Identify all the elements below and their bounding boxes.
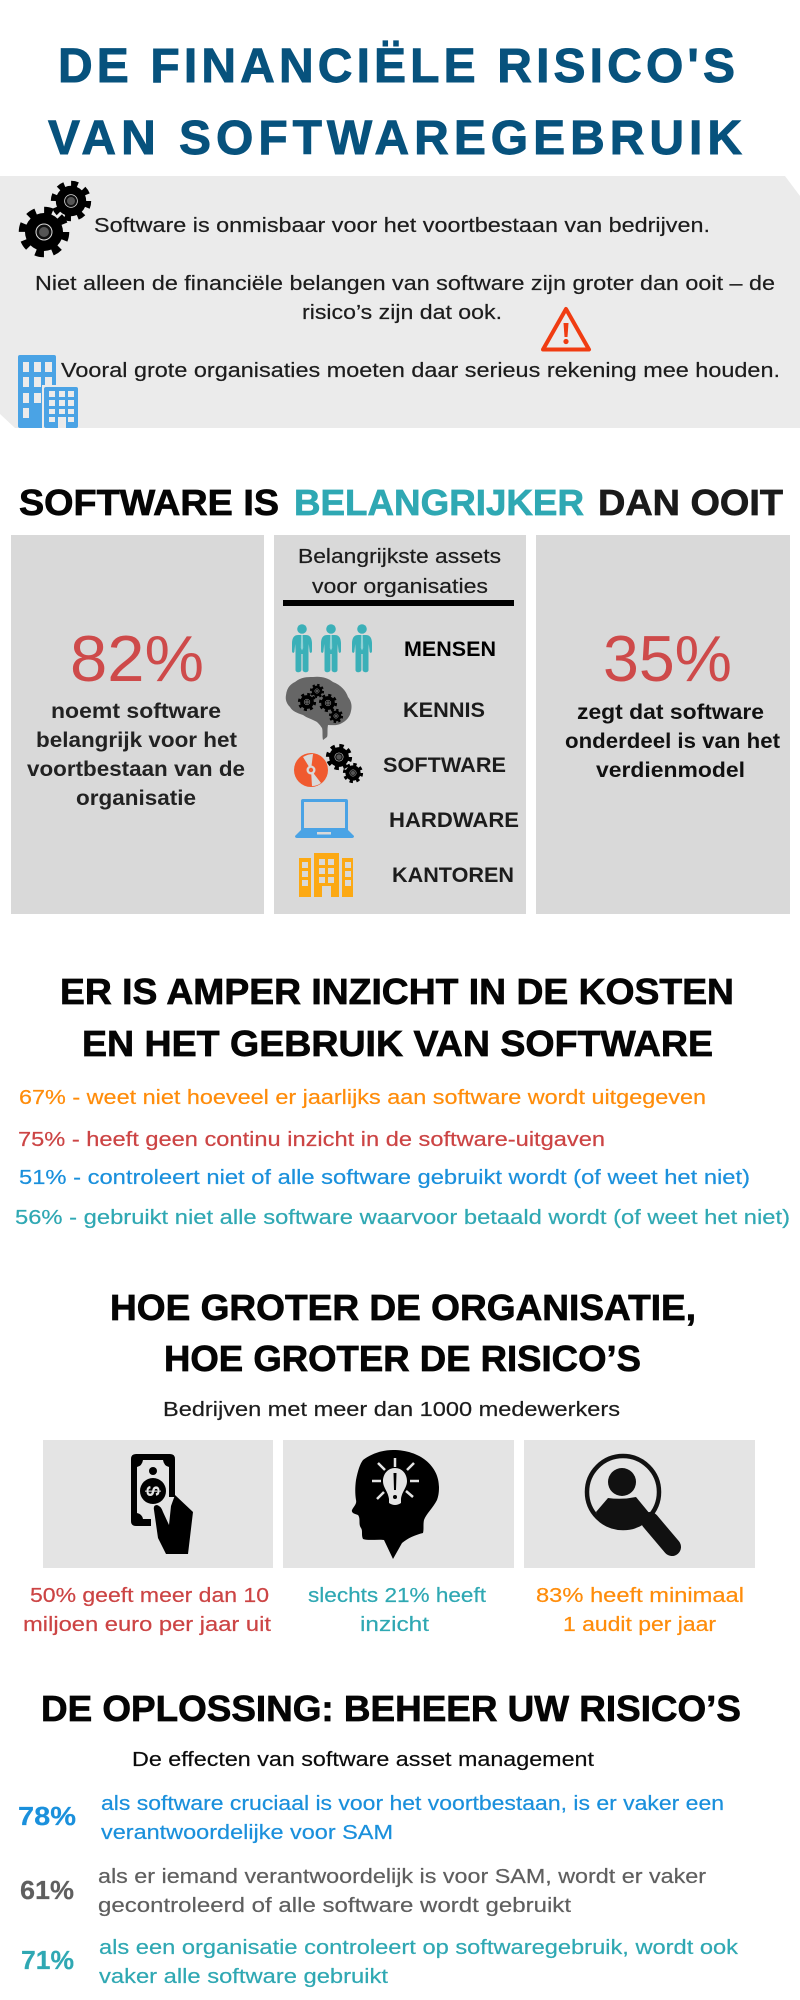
label: kennis: KENNIS	[403, 699, 485, 722]
caption: insight: slechts 21% heeft	[308, 1585, 486, 1607]
caption: insight	[308, 1585, 486, 1636]
effect: 78 percent	[18, 1793, 724, 1844]
icon: office buildings	[18, 355, 80, 428]
title	[48, 40, 742, 165]
effect: 78 percent: als software cruciaal is voor het voortbestaan, is er vaker een	[101, 1793, 724, 1815]
panel: insight	[283, 1440, 514, 1568]
caption: audit: 83% heeft minimaal	[536, 1585, 744, 1607]
list: statistics on insight	[15, 1087, 790, 1229]
intro text: software is essential: Software is onmisbaar voor het voortbestaan van bedrijven.	[94, 215, 710, 237]
statistic 51%: 51% - controleert niet of alle software gebruikt wordt (of weet het niet)	[19, 1167, 750, 1189]
intro text: risks: risico’s zijn dat ook.	[302, 302, 502, 324]
intro text: large organisations: Vooral grote organisaties moeten daar serieus rekening mee houden.	[61, 360, 780, 382]
statistic: 35%: 35%	[603, 622, 732, 695]
heading: software is belangrijker dan ooit	[19, 482, 783, 523]
label: kantoren: KANTOREN	[392, 864, 514, 887]
icon: hand holding money: $	[142, 1486, 162, 1497]
description: zegt dat software	[577, 701, 764, 724]
heading: weinig inzicht: ER IS AMPER INZICHT IN DE KOSTEN	[60, 971, 734, 1012]
subheading: De effecten van software asset management	[132, 1749, 595, 1771]
heading: hoe groter de organisatie	[110, 1287, 696, 1379]
description: noemt software	[51, 700, 221, 723]
description	[27, 700, 245, 810]
icon: people	[292, 624, 372, 672]
intro text: risks: Niet alleen de financiële belangen van software zijn groter dan ooit – de	[35, 273, 775, 295]
description: onderdeel is van het	[565, 730, 780, 753]
effect: 78 percent: 78%	[18, 1801, 76, 1831]
icon: disc with gears	[294, 746, 362, 787]
caption: insight: inzicht	[360, 1614, 430, 1636]
effect: 78 percent: verantwoordelijke voor SAM	[101, 1822, 393, 1844]
title: VAN SOFTWAREGEBRUIK	[48, 112, 742, 165]
panel: 35 percent	[536, 535, 790, 914]
statistic: 82%: 82%	[70, 622, 204, 695]
panel: important assets	[274, 535, 526, 914]
effect: 71 percent: als een organisatie controleert op softwaregebruik, wordt ook	[99, 1937, 739, 1959]
description: verdienmodel	[596, 759, 745, 782]
description: organisatie	[76, 787, 196, 810]
subheading: Bedrijven met meer dan 1000 medewerkers	[163, 1399, 620, 1421]
statistic 67%: 67% - weet niet hoeveel er jaarlijks aan software wordt uitgegeven	[19, 1087, 706, 1109]
description: voortbestaan van de	[27, 758, 245, 781]
icon: gears	[22, 184, 88, 254]
icon: warning triangle	[543, 309, 589, 350]
effect: 61 percent	[20, 1866, 706, 1917]
statistic 75%: 75% - heeft geen continu inzicht in de software-uitgaven	[18, 1129, 605, 1151]
panel: spending	[43, 1440, 273, 1568]
caption: spending: miljoen euro per jaar uit	[23, 1614, 272, 1636]
effect: 61 percent: 61%	[20, 1875, 74, 1905]
heading: software is belangrijker dan ooit: DAN OOIT	[598, 482, 783, 523]
effect: 71 percent: vaker alle software gebruikt	[99, 1966, 389, 1988]
caption: spending	[23, 1585, 272, 1636]
effect: 61 percent: gecontroleerd of alle software wordt gebruikt	[98, 1895, 572, 1917]
panel: introduction	[0, 176, 800, 428]
statistic 56%: 56% - gebruikt niet alle software waarvoor betaald wordt (of weet het niet)	[15, 1207, 790, 1229]
heading: software is belangrijker dan ooit: BELANGRIJKER	[294, 482, 584, 523]
panel: audit	[524, 1440, 755, 1568]
icon: head with light bulb	[352, 1450, 439, 1559]
icon: laptop	[295, 799, 354, 838]
caption: spending: 50% geeft meer dan 10	[30, 1585, 269, 1607]
heading: weinig inzicht: EN HET GEBRUIK VAN SOFTWARE	[82, 1023, 713, 1064]
heading: hoe groter de organisatie: HOE GROTER DE ORGANISATIE,	[110, 1287, 696, 1328]
caption: audit: 1 audit per jaar	[563, 1614, 716, 1636]
effect: 71 percent: 71%	[21, 1945, 74, 1975]
effect: 71 percent	[21, 1937, 739, 1988]
panel heading: Belangrijkste assets	[298, 546, 501, 568]
label: mensen: MENSEN	[404, 638, 496, 661]
panel heading: voor organisaties	[312, 576, 488, 598]
description	[565, 701, 780, 782]
heading: weinig inzicht	[60, 971, 734, 1064]
icon: hand holding money	[131, 1454, 193, 1554]
icon: magnifier with person	[587, 1456, 672, 1547]
effect: 61 percent: als er iemand verantwoordelijk is voor SAM, wordt er vaker	[98, 1866, 706, 1888]
heading: software is belangrijker dan ooit: SOFTWARE IS	[19, 482, 279, 523]
label: software: SOFTWARE	[383, 754, 506, 777]
panel: 82 percent	[11, 535, 264, 914]
icon: office building	[299, 853, 353, 897]
heading: de oplossing: DE OPLOSSING: BEHEER UW RISICO’S	[41, 1688, 741, 1729]
icon: brain with gears	[286, 677, 352, 740]
label: hardware: HARDWARE	[389, 809, 519, 832]
heading: hoe groter de organisatie: HOE GROTER DE RISICO’S	[164, 1338, 641, 1379]
panel heading	[298, 546, 501, 598]
intro text: risks	[35, 273, 775, 324]
caption: audit	[536, 1585, 744, 1636]
title: DE FINANCIËLE RISICO'S	[58, 40, 735, 93]
description: belangrijk voor het	[36, 729, 237, 752]
